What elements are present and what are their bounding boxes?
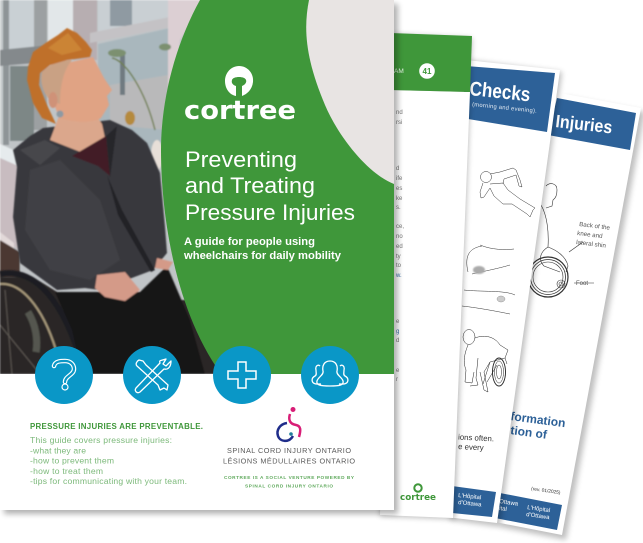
- text block: guide contents: -how to treat them: [30, 466, 103, 476]
- page 4 footer text: [499, 499, 551, 521]
- grey corner shape: [306, 0, 394, 184]
- logo: Spinal Cord Injury Ontario: SPINAL CORD INJURY ONTARIO: [227, 446, 351, 455]
- page 3 footer text: L'Hôpital: [458, 493, 481, 501]
- page 3 subheading: (morning and evening).: [472, 102, 537, 115]
- icon: team: [301, 346, 359, 404]
- page 4 heading: Injuries: [555, 111, 613, 137]
- page 4 header band: [548, 98, 636, 150]
- page 2 body text fragments: e: [396, 368, 400, 374]
- annotation: foot: Foot: [576, 281, 588, 287]
- page 2 header text: AM: [394, 68, 404, 75]
- text block: guide contents: This guide covers pressure injuries:: [30, 435, 172, 445]
- page 3 footer text: d'Ottawa: [458, 500, 482, 509]
- page 2 body text fragments: no: [396, 234, 403, 240]
- page 4 footer text: d'Ottawa: [526, 512, 550, 521]
- lower dark backdrop: [0, 277, 240, 374]
- page 2 body text fragments: ce,: [396, 224, 404, 230]
- shirt: [72, 136, 110, 176]
- page 3 footer band: [452, 486, 496, 517]
- cover title: and Treating: [185, 173, 315, 198]
- cover title: Pressure Injuries: [185, 200, 355, 225]
- revision note: (rev. 01/2025): [531, 486, 561, 496]
- page 3 header band: [462, 66, 555, 132]
- page 4: injuries sheet: [490, 93, 643, 540]
- cortree logo: cortree: [184, 96, 296, 126]
- page 3 heading: Checks: [468, 78, 531, 106]
- page 2 body text fragments: nd: [396, 110, 403, 116]
- page 4 body heading: tion of: [510, 423, 549, 442]
- text block: social venture note: SPINAL CORD INJURY ONTARIO: [245, 484, 333, 488]
- page 2 body text fragments: rsi: [396, 120, 402, 126]
- hair: [27, 28, 92, 124]
- trousers: [55, 266, 205, 374]
- annotation: back of knee: knee and: [577, 230, 603, 240]
- text block: guide contents: -how to prevent them: [30, 456, 114, 466]
- text block: social venture note: [224, 475, 355, 488]
- cortree small logo: [400, 484, 436, 503]
- illustration: seated person in wheelchair: [528, 184, 594, 297]
- page 2 body text fragments: [395, 110, 404, 383]
- page 3 body text: [458, 433, 494, 452]
- icon: plus: [213, 346, 271, 404]
- text block: guide contents: [30, 435, 187, 486]
- page 2 body text fragments: e: [396, 319, 400, 325]
- cover subtitle: wheelchairs for daily mobility: [183, 250, 342, 262]
- text block: preventable statement: PRESSURE INJURIES ARE PREVENTABLE.: [30, 422, 203, 431]
- hoodie: [13, 120, 167, 290]
- page 2 header band: [390, 33, 472, 92]
- green cover shape: [161, 0, 394, 374]
- text block: guide contents: -tips for communicating with your team.: [30, 476, 187, 486]
- page 2 body text fragments: ed: [396, 244, 403, 250]
- hand: [95, 272, 140, 301]
- page 2 body text fragments: to: [396, 263, 402, 269]
- cover subtitle: A guide for people using: [184, 236, 315, 248]
- page 4 footer band: [495, 493, 562, 530]
- text block: guide contents: -what they are: [30, 446, 86, 456]
- page 4 body heading: [510, 409, 566, 442]
- page 2 body text fragments: w.: [395, 273, 402, 279]
- annotation: back of knee: Back of the: [579, 221, 611, 232]
- logo: Spinal Cord Injury Ontario: LÉSIONS MÉDULLAIRES ONTARIO: [223, 456, 355, 466]
- page 3 body text: e every: [458, 442, 484, 452]
- page 2 body text fragments: d: [396, 166, 399, 172]
- page number badge: 41: [423, 67, 432, 76]
- logo: Spinal Cord Injury Ontario: [223, 407, 355, 466]
- woman in wheelchair: [0, 27, 215, 374]
- wheel: [0, 273, 78, 374]
- illustration: person lying: [480, 168, 535, 217]
- cover photo: [0, 0, 215, 374]
- page 2 body text fragments: ty: [396, 254, 401, 260]
- annotation: back of knee: [576, 221, 611, 250]
- illustration: leg with pressure mark: [462, 245, 515, 314]
- page 2 body text fragments: r: [396, 377, 398, 383]
- page 1: front cover: [0, 0, 398, 514]
- text block: social venture note: CORTREE IS A SOCIAL VENTURE POWERED BY: [224, 475, 355, 480]
- window background: [0, 0, 213, 374]
- face: [53, 57, 112, 122]
- page 4 footer text: L'Hôpital: [527, 505, 551, 514]
- cover title: Preventing: [185, 147, 297, 172]
- page 3: checks sheet: [446, 60, 562, 527]
- icon: tools: [123, 346, 181, 404]
- page 2 body text fragments: g: [396, 329, 399, 335]
- cortree small logo: cortree: [400, 493, 436, 503]
- icon: question mark: [35, 346, 93, 404]
- page 4 footer text: ital: [499, 506, 507, 513]
- cortree logo: [184, 66, 296, 126]
- page 2 body text fragments: es: [396, 186, 402, 192]
- page 4 body heading: formation: [510, 409, 566, 430]
- page 2 body text fragments: ke: [396, 196, 403, 202]
- page 3 body text: ions often.: [458, 433, 494, 443]
- annotation: back of knee: lateral shin: [576, 239, 607, 250]
- page 4 footer text: Ottawa: [499, 499, 519, 508]
- page number badge: [419, 63, 435, 79]
- page 3 footer text: [458, 493, 482, 509]
- page 2 body text fragments: s.: [396, 205, 401, 211]
- cover subtitle: [183, 236, 342, 262]
- page 2 body text fragments: d: [396, 338, 399, 344]
- illustration: person bending in wheelchair: [463, 330, 508, 392]
- cover title: [185, 147, 355, 225]
- page 2: team sheet: [380, 33, 472, 519]
- neck and chest: [49, 116, 106, 153]
- page 2 body text fragments: ife: [396, 176, 403, 182]
